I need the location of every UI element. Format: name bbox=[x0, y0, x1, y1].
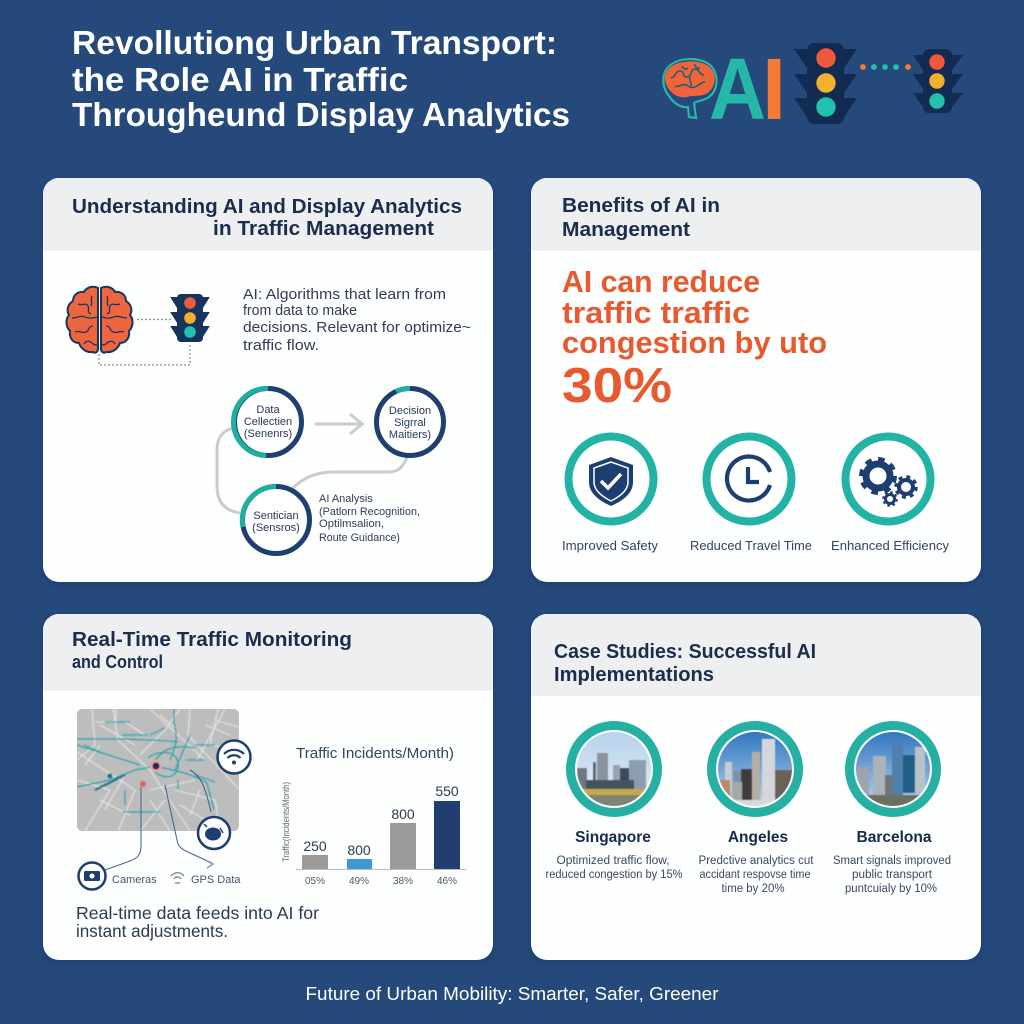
Angeles caption: time by 20% bbox=[722, 883, 784, 895]
AI lettering: I bbox=[762, 41, 786, 138]
bar categories: 05% bbox=[305, 876, 325, 887]
map bbox=[77, 700, 240, 831]
benefit labels: Enhanced Efficiency bbox=[831, 538, 949, 553]
Barcelona caption: Barcelona bbox=[857, 829, 932, 846]
legend: cameras: Cameras bbox=[112, 874, 157, 886]
heading: case studies: Implementations bbox=[554, 664, 714, 686]
heading: understanding AI: in Traffic Management bbox=[213, 218, 434, 240]
node: decision: Sigrral bbox=[394, 417, 426, 429]
city: Singapore photo bbox=[570, 726, 658, 812]
key statistic: AI can reduce bbox=[562, 265, 760, 299]
Singapore caption: Singapore bbox=[575, 829, 651, 846]
node: decision bbox=[376, 388, 444, 456]
text block: AI definition: decisions. Relevant for optimize~ bbox=[243, 319, 471, 336]
bar values: 550 bbox=[435, 783, 459, 799]
heading: monitoring: Real-Time Traffic Monitoring bbox=[72, 629, 352, 651]
icon: camera badge bbox=[78, 862, 106, 890]
icon: wifi badge bbox=[218, 740, 250, 774]
key statistic: congestion by uto bbox=[562, 326, 827, 360]
heading: case studies: Case Studies: Successful AI bbox=[554, 641, 816, 663]
icon: shield bbox=[568, 436, 654, 522]
dotted connector brain to light bbox=[99, 320, 190, 365]
Angeles caption bbox=[698, 829, 814, 895]
node: sensors: Sentician bbox=[253, 510, 299, 522]
Singapore caption: Optimized traffic flow, bbox=[556, 855, 670, 867]
text block: AI analysis: Optilmsalion, bbox=[319, 518, 384, 530]
icon: brain bbox=[66, 287, 133, 353]
panel: benefits bbox=[531, 178, 981, 582]
node: sensors bbox=[242, 486, 310, 554]
footer: Future of Urban Mobility: Smarter, Safer, Greener bbox=[306, 984, 718, 1004]
city: Barcelona photo bbox=[850, 726, 936, 812]
heading: benefits: Benefits of AI in bbox=[562, 194, 720, 217]
node: data collection bbox=[233, 388, 302, 456]
text block: AI analysis: AI Analysis bbox=[319, 493, 373, 505]
legend: GPS: GPS Data bbox=[191, 874, 241, 886]
title bbox=[72, 25, 570, 134]
heading: benefits: Management bbox=[562, 218, 690, 241]
chart title: Traffic Incidents/Month) bbox=[296, 746, 454, 762]
heading: benefits bbox=[562, 194, 720, 241]
node: decision: Maitiers) bbox=[389, 429, 431, 441]
text block: real-time caption bbox=[76, 903, 319, 941]
Angeles caption: accidant respovse time bbox=[700, 869, 810, 881]
y axis label: Traffic(Incidents/Month) bbox=[281, 782, 291, 862]
node: data collection: Data bbox=[256, 404, 280, 416]
panel: monitoring bbox=[43, 614, 493, 960]
heading: monitoring bbox=[72, 629, 352, 672]
Singapore caption bbox=[546, 829, 682, 881]
panel: case studies bbox=[531, 614, 981, 960]
map links bbox=[105, 770, 213, 870]
header icon: brain, AI and traffic lights bbox=[663, 41, 963, 138]
key statistic bbox=[562, 265, 827, 413]
Barcelona caption: puntcuialy by 10% bbox=[845, 883, 937, 895]
key statistic: traffic traffic bbox=[562, 296, 750, 330]
bar categories bbox=[305, 876, 457, 887]
text block: AI definition: from data to make bbox=[243, 302, 357, 319]
panel: understanding AI bbox=[43, 178, 493, 582]
title: the Role AI in Traffic bbox=[72, 62, 408, 99]
bar chart bbox=[281, 746, 466, 887]
node: sensors: (Sensros) bbox=[252, 522, 300, 534]
Angeles caption: Angeles bbox=[728, 829, 788, 846]
title: Revollutiong Urban Transport: bbox=[72, 25, 557, 62]
AI lettering: A bbox=[709, 41, 766, 138]
icon: header brain bbox=[663, 59, 717, 118]
Barcelona caption: Smart signals improved bbox=[833, 855, 951, 867]
arrow bbox=[315, 414, 362, 434]
benefit labels bbox=[562, 538, 949, 553]
heading: understanding AI: Understanding AI and Display Analytics bbox=[72, 196, 462, 218]
benefit labels: Reduced Travel Time bbox=[690, 538, 812, 553]
bar values bbox=[303, 783, 459, 858]
text block: AI definition: traffic flow. bbox=[243, 337, 319, 354]
text block: real-time caption: instant adjustments. bbox=[76, 921, 228, 941]
Barcelona caption: public transport bbox=[852, 869, 933, 881]
text block: AI definition: AI: Algorithms that learn from bbox=[243, 286, 446, 303]
node: decision: Decision bbox=[389, 405, 431, 417]
icon: gears bbox=[846, 436, 930, 522]
text block: AI analysis: (Patlorn Recognition, bbox=[319, 506, 420, 518]
heading: monitoring: and Control bbox=[72, 652, 163, 672]
heading: case studies bbox=[554, 641, 816, 686]
bar values: 800 bbox=[347, 842, 371, 858]
node: data collection: Cellectien bbox=[244, 416, 292, 428]
node: data collection: (Senenrs) bbox=[244, 428, 292, 440]
icon: GPS signal bbox=[171, 873, 184, 883]
dotted connector bbox=[860, 64, 911, 70]
text block: AI analysis: Route Guidance) bbox=[319, 532, 400, 544]
title: Througheund Display Analytics bbox=[72, 97, 570, 134]
bar values: 250 bbox=[303, 838, 327, 854]
bar categories: 38% bbox=[393, 876, 413, 887]
bar categories: 49% bbox=[349, 876, 369, 887]
icon: small traffic light bbox=[913, 49, 963, 113]
benefit labels: Improved Safety bbox=[562, 538, 659, 553]
icon: clock bbox=[706, 436, 792, 522]
icon: traffic light bbox=[172, 294, 208, 342]
Angeles caption: Predctive analytics cut bbox=[698, 855, 814, 867]
key statistic: 30% bbox=[562, 359, 672, 413]
text block: real-time caption: Real-time data feeds into AI for bbox=[76, 903, 319, 923]
heading: understanding AI bbox=[72, 196, 462, 240]
icon: large traffic light bbox=[794, 43, 857, 124]
text block: AI analysis bbox=[319, 493, 420, 544]
Barcelona caption bbox=[833, 829, 951, 895]
bar categories: 46% bbox=[437, 876, 457, 887]
Singapore caption: reduced congestion by 15% bbox=[546, 869, 682, 881]
icon: sensor badge bbox=[198, 817, 230, 849]
flow connectors bbox=[217, 428, 407, 513]
city: Angeles photo bbox=[712, 726, 798, 812]
bar values: 800 bbox=[391, 806, 415, 822]
text block: AI definition bbox=[243, 286, 471, 354]
